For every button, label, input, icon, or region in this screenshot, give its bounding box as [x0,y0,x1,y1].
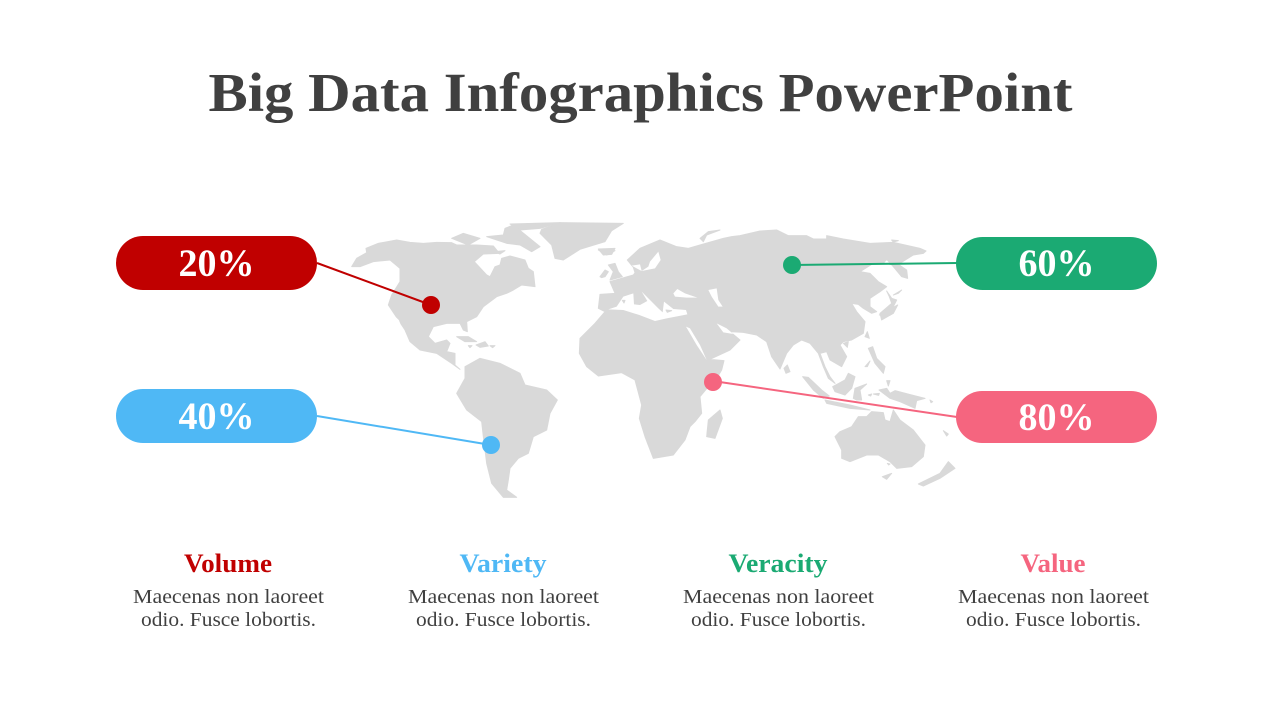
pill: 80% [956,391,1157,443]
marker: Variety [482,436,500,454]
marker: Volume [422,296,440,314]
connector: Variety [317,416,491,445]
text block: Value [958,549,1149,631]
text block: Variety: Maecenas non laoreet [408,586,599,608]
text block: Value: Value [1020,549,1086,578]
text block: Volume: Maecenas non laoreet [133,586,324,608]
pill: 40% [116,389,317,443]
text block: Veracity: Veracity [728,549,828,578]
marker: Veracity [783,256,801,274]
connector: Volume [317,263,431,305]
pill: 60% [956,237,1157,290]
Eurasia and Africa [579,230,926,458]
pill: 40%: 40% [178,395,254,438]
Arctic islands [700,230,898,242]
marker: Value [704,373,722,391]
text block: Variety: odio. Fusce lobortis. [416,609,591,631]
Mediterranean and seas [608,252,733,360]
pill: 20%: 20% [178,242,254,285]
text block: Variety: Variety [460,549,546,578]
world map [352,223,955,497]
text block: Volume: Volume [184,549,272,578]
title: Big Data Infographics PowerPoint [208,62,1073,123]
text block: Volume: odio. Fusce lobortis. [141,609,316,631]
text block: Value: Maecenas non laoreet [958,586,1149,608]
connector: Veracity [792,263,957,265]
text block: Veracity [683,549,874,631]
text block: Veracity: odio. Fusce lobortis. [691,609,866,631]
text block: Volume [133,549,324,631]
pill: 60%: 60% [1018,242,1094,285]
pill: 80%: 80% [1018,396,1094,439]
pill: 20% [116,236,317,290]
connector: Value [713,381,957,417]
text block: Veracity: Maecenas non laoreet [683,586,874,608]
text block: Variety [408,549,599,631]
text block: Value: odio. Fusce lobortis. [966,609,1141,631]
